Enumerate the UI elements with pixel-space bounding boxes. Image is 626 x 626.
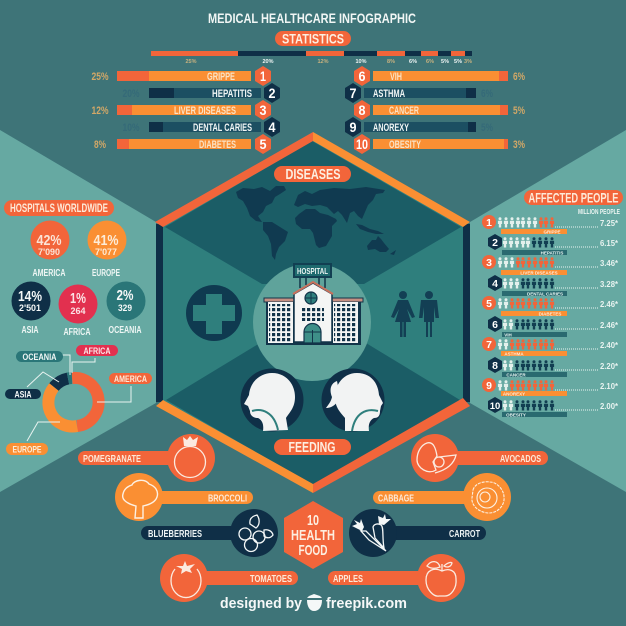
panel: affected people — [482, 190, 623, 418]
row 5 — [482, 296, 619, 316]
row 1 gripe — [92, 66, 271, 86]
row 2: HEPATITIS — [541, 250, 563, 256]
row 4: DENTAL CARIES — [527, 292, 563, 296]
row 8 cancer: 5% — [513, 105, 525, 117]
row 8 cancer — [354, 100, 525, 120]
row 9 anorexy: 5% — [481, 122, 493, 134]
row 6 vih: VIH — [390, 71, 402, 83]
row 3: 3 — [486, 257, 492, 269]
row 8 cancer: CANCER — [389, 105, 419, 117]
people icon — [391, 291, 439, 337]
row 9: 2.10* — [600, 382, 619, 391]
food: carrot: CARROT — [449, 528, 480, 540]
food: blueberries: BLUEBERRIES — [148, 528, 202, 540]
food: carrot — [349, 509, 486, 557]
side panel: left — [0, 130, 156, 492]
row 4 — [488, 275, 619, 296]
row 6: 6 — [492, 319, 498, 331]
stat: africa: AFRICA — [64, 327, 90, 338]
row 2 — [488, 234, 619, 256]
heading: hospitals worldwide — [4, 200, 114, 216]
donut chart — [27, 355, 131, 441]
row 1: 7.25* — [600, 219, 619, 228]
medical cross icon — [186, 285, 242, 341]
heading: diseases: DISEASES — [286, 167, 341, 183]
row 10 — [488, 397, 619, 418]
row 6 — [488, 316, 619, 338]
row 8: CANCER — [506, 372, 526, 378]
row 1 — [482, 215, 619, 234]
row 4 dental caries: 4 — [268, 119, 276, 135]
stat: oceania — [106, 282, 146, 336]
stacked percent bar: 10% — [355, 59, 367, 65]
row 8: 8 — [492, 360, 498, 372]
row 1 gripe: GRIPPE — [207, 71, 235, 83]
center circle — [253, 263, 371, 381]
row 2: 6.15* — [600, 239, 619, 248]
food: blueberries — [141, 509, 278, 557]
hexagon: 10 health food: FOOD — [298, 542, 328, 559]
central hexagon — [155, 132, 470, 493]
stacked percent bar: 20% — [262, 59, 274, 65]
row 3 liver diseases: 3 — [260, 102, 267, 118]
stacked percent bar: 12% — [317, 59, 329, 65]
stat: asia: ASIA — [22, 325, 38, 336]
food: broccoli — [115, 473, 253, 521]
row 9: ANOREXY — [503, 392, 525, 396]
row 5: 5 — [486, 298, 492, 310]
row 10: OBESITY — [506, 412, 526, 418]
row 5: DIABETES — [539, 312, 561, 316]
stat: europe: EUROPE — [92, 268, 120, 279]
row 7 asthma: 7 — [350, 85, 357, 101]
stat: america: 7'090 — [38, 247, 60, 258]
row 10 obesity — [354, 134, 525, 154]
stat: europe: 7'077 — [95, 247, 117, 258]
hexagon: 10 health food: 10 — [307, 512, 319, 529]
stat: oceania: 329 — [118, 303, 132, 314]
row 7 asthma: ASTHMA — [373, 88, 405, 100]
row 4 dental caries — [122, 117, 280, 137]
row 5: 2.46* — [600, 300, 619, 309]
label: europe — [6, 443, 48, 456]
row 2: 2 — [492, 237, 498, 249]
stacked percent bar: 6% — [426, 59, 434, 65]
stacked percent bar: 6% — [409, 59, 417, 65]
stacked percent bar: 3% — [464, 59, 472, 65]
food: apples: APPLES — [333, 573, 363, 585]
world map — [236, 186, 396, 260]
row 1 gripe: 1 — [260, 68, 266, 84]
stat: america — [30, 220, 70, 279]
footer: designed by freepik — [220, 594, 407, 612]
row 5 diabetes: DIABETES — [199, 139, 236, 151]
stacked percent bar: 8% — [387, 59, 395, 65]
label: asia: ASIA — [14, 390, 32, 400]
row 5 diabetes — [94, 134, 271, 154]
row 7: 7 — [486, 339, 492, 351]
row 4 dental caries: DENTAL CARIES — [193, 122, 252, 134]
stacked percent bar: 5% — [441, 59, 449, 65]
stacked percent bar — [151, 51, 472, 65]
row 1 gripe: 25% — [92, 71, 109, 83]
row 6: 2.46* — [600, 321, 619, 330]
food: pomegranate — [78, 434, 215, 482]
heading: feeding: FEEDING — [288, 440, 336, 456]
panel: 10 health food — [78, 434, 548, 602]
stat: oceania: 2% — [116, 287, 134, 304]
row 10 obesity: 3% — [513, 139, 525, 151]
row 9 anorexy: 9 — [350, 119, 357, 135]
heading: statistics: STATISTICS — [282, 30, 344, 46]
stat: america: AMERICA — [32, 268, 66, 279]
side panel: right — [470, 130, 626, 492]
stat: europe: 41% — [94, 232, 118, 249]
row 7 — [482, 337, 619, 356]
row 4 dental caries: 10% — [122, 122, 140, 134]
row 7: ASTHMA — [504, 352, 524, 356]
label: asia — [5, 389, 41, 400]
food: cabbage — [373, 473, 511, 521]
head icon: female — [322, 368, 384, 432]
row 10 obesity: OBESITY — [389, 139, 421, 151]
hexagon: 10 health food — [284, 501, 343, 569]
row 8: 2.20* — [600, 362, 619, 371]
food: avocados — [411, 434, 548, 482]
stat: africa: 264 — [70, 306, 86, 317]
footer: designed by freepik: freepik.com — [326, 595, 407, 612]
row 9 anorexy — [345, 117, 493, 137]
stat: asia: 14% — [18, 288, 42, 305]
row 3 liver diseases: 12% — [92, 105, 109, 117]
hospital icon — [264, 263, 363, 345]
food: avocados: AVOCADOS — [500, 453, 541, 465]
label: europe: EUROPE — [12, 444, 42, 456]
row 5 diabetes: 8% — [94, 139, 106, 151]
hexagon: 10 health food: HEALTH — [291, 527, 335, 544]
title: MEDICAL HEALTHCARE INFOGRAPHIC — [208, 10, 416, 26]
row 3: 3.46* — [600, 259, 619, 268]
row 8 cancer: 8 — [358, 102, 366, 118]
food: pomegranate: POMEGRANATE — [83, 453, 141, 465]
stat: asia — [12, 282, 50, 336]
stat: america: 42% — [36, 232, 62, 249]
food: tomatoes: TOMATOES — [250, 573, 292, 585]
row 10: 10 — [490, 401, 500, 412]
stacked percent bar: 5% — [454, 59, 462, 65]
row 3 — [482, 255, 619, 276]
row 1: 1 — [486, 217, 492, 229]
row 7 asthma: 6% — [481, 88, 493, 100]
stat: africa — [58, 284, 98, 338]
row 4: 4 — [492, 278, 498, 290]
row 10 obesity: 10 — [356, 136, 368, 152]
stat: africa: 1% — [70, 290, 86, 307]
row 2 hepatitis: HEPATITIS — [212, 88, 252, 100]
row 7: 2.40* — [600, 341, 619, 350]
row 6 vih: 6% — [513, 71, 525, 83]
stacked percent bar: 25% — [185, 59, 197, 65]
food: cabbage: CABBAGE — [378, 492, 414, 504]
row 2 hepatitis: 20% — [122, 88, 140, 100]
row 4: 3.28* — [600, 280, 619, 289]
footer: designed by freepik: designed by — [220, 595, 303, 612]
row 3: LIVER DISEASES — [520, 270, 558, 276]
label: africa: AFRICA — [84, 346, 111, 357]
head icon: male — [240, 368, 304, 432]
food: tomatoes — [160, 554, 298, 602]
food: apples — [328, 554, 465, 602]
stat: asia: 2'501 — [19, 303, 42, 314]
stat: oceania: OCEANIA — [108, 325, 142, 336]
row 8 — [488, 357, 619, 378]
row 9 anorexy: ANOREXY — [373, 122, 409, 134]
row 9 — [482, 378, 619, 396]
row 3 liver diseases: LIVER DISEASES — [174, 105, 236, 117]
row 2 hepatitis: 2 — [268, 85, 276, 101]
label: oceania: OCEANIA — [22, 352, 57, 363]
label: america: AMERICA — [114, 374, 147, 385]
heading: hospitals worldwide: HOSPITALS WORLDWIDE — [10, 203, 108, 215]
row 6 vih: 6 — [358, 68, 366, 84]
statistics rows: left — [92, 66, 280, 154]
row 5 diabetes: 5 — [260, 136, 267, 152]
row 1: GRIPPE — [543, 230, 561, 234]
stat: europe — [88, 220, 126, 279]
row 9: 9 — [486, 380, 492, 392]
hospital icon: HOSPITAL — [297, 266, 328, 276]
statistics rows: right — [345, 66, 525, 154]
row 6 vih — [354, 66, 525, 86]
row 3 liver diseases — [92, 100, 271, 120]
row 10: 2.00* — [600, 402, 619, 411]
row 2 hepatitis — [122, 83, 280, 103]
food: broccoli: BROCCOLI — [208, 492, 247, 504]
row 6: VIH — [504, 332, 512, 338]
row 7 asthma — [345, 83, 493, 103]
panel: hospitals worldwide — [4, 200, 152, 456]
